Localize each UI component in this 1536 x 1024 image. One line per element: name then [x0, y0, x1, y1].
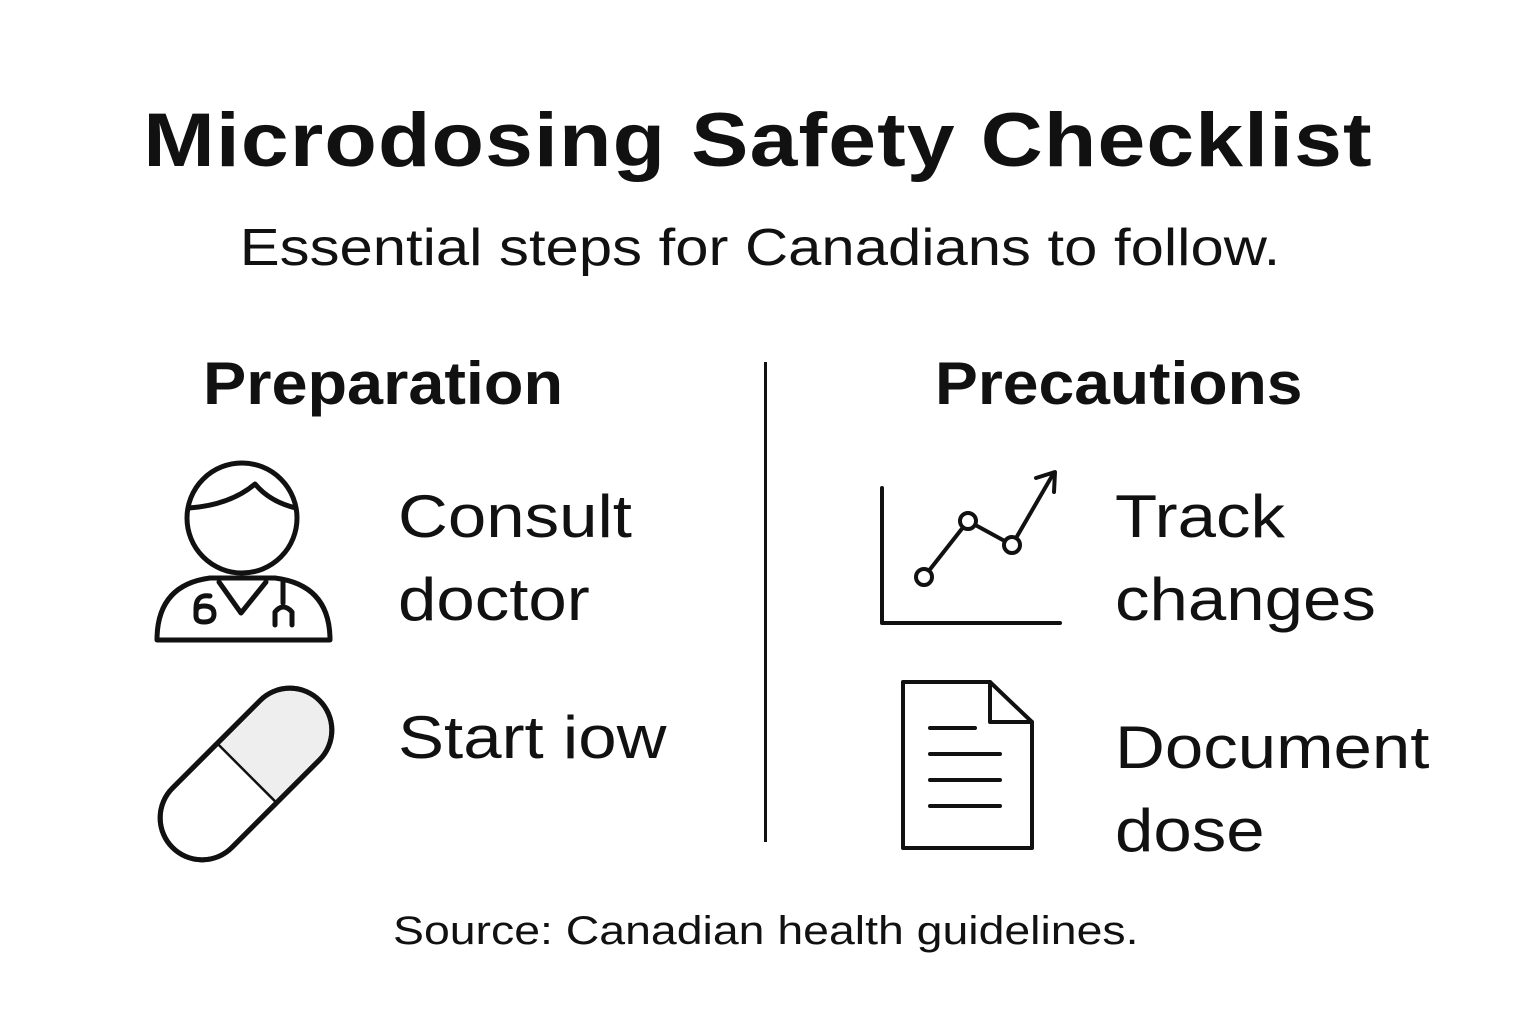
text: consult doctor: Consult — [398, 483, 632, 550]
source: Source: Canadian health guidelines. — [393, 909, 1139, 953]
subtitle: Essential steps for Canadians to follow. — [240, 219, 1280, 277]
text: document dose — [1115, 714, 1429, 864]
title: Microdosing Safety Checklist — [143, 98, 1373, 183]
text: track changes — [1115, 483, 1376, 633]
heading: preparation: Preparation — [203, 350, 563, 417]
text: start low: Start iow — [398, 704, 666, 771]
text: document dose: Document — [1115, 714, 1429, 781]
text: consult doctor: doctor — [398, 566, 590, 633]
text: consult doctor — [398, 483, 632, 633]
divider — [764, 362, 767, 842]
text: document dose: dose — [1115, 797, 1265, 864]
heading: precautions: Precautions — [935, 350, 1302, 417]
text: track changes: Track — [1115, 483, 1285, 550]
text: track changes: changes — [1115, 566, 1376, 633]
